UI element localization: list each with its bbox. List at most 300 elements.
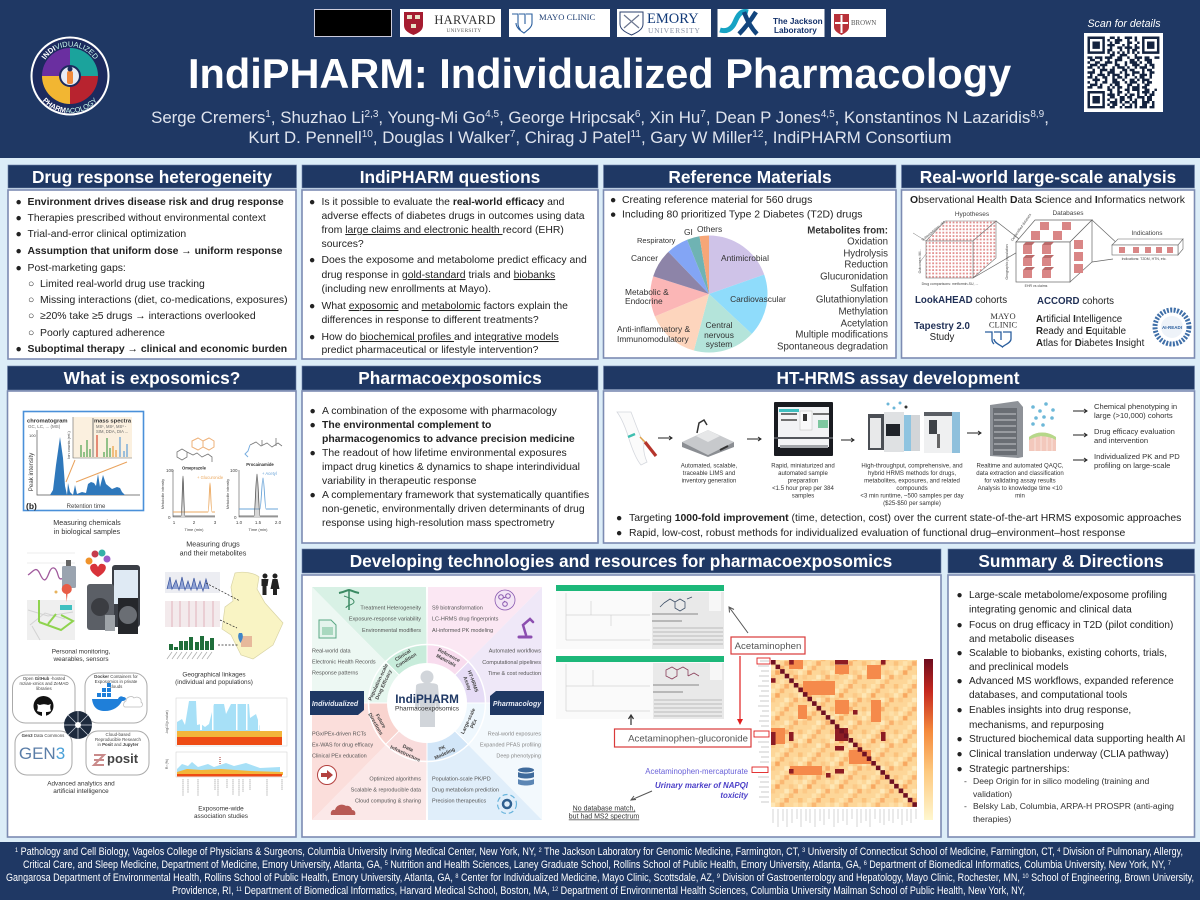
ring labels: Data <box>401 744 414 754</box>
caption: chemicals: Measuring chemicals <box>53 518 121 527</box>
side banners: Individualized <box>312 701 359 708</box>
drug chromatograms <box>161 438 282 532</box>
question list: sources? <box>322 239 364 250</box>
bullet list: Missing interactions (diet, co-medications, exposures) <box>40 295 288 306</box>
footer: affiliations: Gangarosa Department of Environmental Health, Rollins School of Public Health, Emory University, Atlanta, GA, <box>6 872 530 884</box>
bullet list: Therapies prescribed without environmental context <box>28 213 266 224</box>
step captions: traceable LIMS and <box>683 471 735 477</box>
outcomes: and intervention <box>1094 436 1148 445</box>
bullet list: ● <box>310 448 316 459</box>
databases cube: Deidentified datasets <box>1010 213 1032 242</box>
chromatogram figure <box>24 412 144 511</box>
AI-READI logo: AI-READI <box>1162 325 1182 330</box>
exposome-wide association plots <box>165 698 287 796</box>
icon: docker whale <box>92 696 126 711</box>
pie chart: drug categories <box>617 224 786 352</box>
central person and title: IndiPHARM <box>395 693 459 706</box>
bullet list: Poorly captured adherence <box>40 328 165 339</box>
IndiPHARM logo <box>30 36 110 116</box>
question list: How do biochemical profiles and integrative models <box>322 332 559 343</box>
icon: LIMS instrument <box>682 420 734 457</box>
authors: , Konstantinos N Lazaridis <box>835 108 1030 127</box>
caption: EWAS: Exposome-wide <box>198 806 244 812</box>
arrow <box>841 438 854 442</box>
footer: affiliations <box>0 842 1200 900</box>
bullet list: ● <box>16 213 22 224</box>
wedge texts <box>312 606 541 804</box>
footer: affiliations: Nutrition and Health Sciences, Laney Graduate School, Rollins School of Public Health, Emory University, Atlanta, GA, <box>388 859 864 871</box>
step captions: <3 min runtime, ~500 samples per day <box>860 494 965 500</box>
authors: , George Hripcsak <box>499 108 635 127</box>
drug chromatograms: 1.5 <box>255 520 262 525</box>
ring labels: Population-scale <box>367 663 390 702</box>
authors: 11 <box>631 129 641 140</box>
partnership sub-list: - <box>964 776 967 786</box>
note: no database match: No database match, <box>573 806 635 812</box>
summary list: and metabolic diseases <box>969 634 1074 645</box>
cohort labels: Tapestry 2.0 <box>914 321 970 332</box>
drug chromatograms: Omeprazole <box>182 466 207 470</box>
step captions: min <box>1015 494 1025 500</box>
side banners: Pharmacology <box>493 701 542 708</box>
wedge texts: PGx/PEx-driven RCTs <box>312 732 366 738</box>
metabolites list: Metabolites from: <box>807 226 888 236</box>
chromatogram figure: (b) <box>26 501 37 511</box>
wedge texts: Optimized algorithms <box>369 776 421 782</box>
bullet list: The readout of how lifetime environmental exposures <box>322 448 567 459</box>
wearables illustration <box>27 550 140 640</box>
OHDSI line: Observational Health Data Science and Informatics network <box>910 195 1186 206</box>
question list: Does the exposome and metabolome predict efficacy and <box>322 255 587 266</box>
drug chromatograms: 2 <box>193 520 196 525</box>
callout: acetaminophen-glucoronide <box>614 729 751 747</box>
footer: affiliations: Department of Environmental Health Sciences, Columbia University Mailman School of Public Health, New York, NY, <box>558 885 1025 897</box>
bullet list: ○ <box>28 295 34 306</box>
panel: Reference Materials <box>604 165 896 358</box>
outcomes <box>1094 402 1180 470</box>
ring labels: Directions <box>366 712 384 737</box>
panel: What is exposomics? <box>8 366 296 837</box>
authors: , Dean P Jones <box>706 108 821 127</box>
databases cube: Databases <box>1052 210 1084 217</box>
question list: ● <box>309 197 315 208</box>
Harvard logo <box>400 9 501 37</box>
footer: affiliations: 7 <box>1168 860 1171 867</box>
analytics tool cards <box>12 673 149 775</box>
bullet list: ● <box>16 197 22 208</box>
spectrum card: acetaminophen-glucuronide <box>556 656 724 719</box>
analytics tool cards: posit <box>107 751 139 766</box>
bullet list: A combination of the exposome with pharmacology <box>322 406 558 417</box>
heading: Pharmacoexposomics <box>358 368 542 388</box>
outcomes: profiling on large-scale <box>1094 461 1170 470</box>
summary list: and preclinical models <box>969 662 1069 673</box>
drug chromatograms: 100 <box>166 468 174 473</box>
heading <box>302 165 598 188</box>
panel: Pharmacoexposomics <box>302 366 598 543</box>
bullet list: non-genetic, environmentally driven determinants of drug <box>322 504 585 515</box>
authors: 2,3 <box>364 109 379 120</box>
Mayo Clinic mark: MAYO <box>990 311 1016 321</box>
ring labels: PEx <box>469 718 479 729</box>
Brown logo: BROWN <box>851 20 876 27</box>
chromatogram figure: Retention time <box>67 504 106 510</box>
mercapturate labels: Urinary marker of NAPQI <box>655 781 749 790</box>
metabolites list: Methylation <box>838 306 888 318</box>
metabolites list: Reduction <box>844 260 888 270</box>
authors: , Douglas I Walker <box>373 128 510 147</box>
icon: robot arm <box>519 619 533 637</box>
header band <box>0 0 1200 158</box>
wedge texts: Exposure-response variability <box>349 616 421 622</box>
indications strip: Indications <box>1131 230 1163 237</box>
summary list: ● <box>956 764 963 775</box>
side banners <box>310 691 544 715</box>
heading: Reference Materials <box>668 167 832 187</box>
analytics tool cards: Exposomics in private <box>95 679 138 684</box>
heatmap colour bar <box>924 659 933 820</box>
analytics tool cards: clouds <box>110 684 123 689</box>
icon: server and data <box>990 401 1056 458</box>
caption: geography: Geographical linkages <box>182 672 246 678</box>
bullet list: ≥20% take ≥5 drugs → interactions overlooked <box>40 311 256 322</box>
summary list: ● <box>956 734 963 745</box>
bullet list: Limited real-world drug use tracking <box>40 279 205 290</box>
authors: 6 <box>635 109 641 120</box>
bullet list: impact drug kinetics & dynamics to shape interindividual <box>322 462 580 473</box>
caption: geography <box>175 672 253 686</box>
central person and title: Pharmacoexposomics <box>395 706 460 712</box>
metabolites list <box>777 226 888 352</box>
wedge texts: Scalable & reproducible data <box>351 788 422 794</box>
caption: wearables: Personal monitoring, <box>52 648 111 656</box>
pie chart: drug categories: nervous <box>704 330 734 340</box>
caption: chemicals: in biological samples <box>54 527 121 536</box>
AI-READI text: Artificial Intelligence <box>1036 314 1122 325</box>
authors: , Young-Mi Go <box>378 108 485 127</box>
icon: database <box>518 768 534 786</box>
authors: 4,5 <box>485 109 499 120</box>
AI-READI text: Atlas for Diabetes Insight <box>1036 338 1145 349</box>
icon: arm with blood draw <box>617 412 656 465</box>
chromatogram figure: 100 <box>29 433 36 438</box>
outcomes: Individualized PK and PD <box>1094 452 1180 461</box>
pie chart: drug categories: Cancer <box>631 253 658 263</box>
AI-READI text <box>1036 314 1145 349</box>
step captions: data extraction and classification <box>976 471 1064 477</box>
wedge texts: Response patterns <box>312 670 358 676</box>
caption: drugs: and their metabolites <box>180 548 247 558</box>
arrow to acetaminophen card <box>729 607 748 633</box>
bottom bullets: ● <box>616 528 622 539</box>
hypotheses cube <box>913 211 996 286</box>
red arrow <box>739 656 741 719</box>
authors <box>151 108 1049 147</box>
ring labels: PK <box>438 744 447 753</box>
pie chart: drug categories: Cardiovascular <box>730 294 786 304</box>
bullet list: response using high-resolution mass spectrometry <box>322 518 555 529</box>
heading: Developing technologies and resources for pharmacoexposomics <box>350 551 892 571</box>
question list <box>309 197 587 356</box>
Emory logo: UNIVERSITY <box>648 26 701 35</box>
step captions: ($25-$50 per sample) <box>883 501 941 507</box>
bullets <box>610 195 862 220</box>
hypotheses cube: Outcomes: MI... <box>918 249 922 273</box>
bullets: ● <box>610 210 616 220</box>
summary list: ● <box>956 648 963 659</box>
summary list: integrating genomic and clinical data <box>969 604 1132 616</box>
authors: , Gary W Miller <box>641 128 753 147</box>
chromatogram figure: chromatogram <box>27 418 68 424</box>
analytics tool cards: Reproducible Research <box>95 737 141 742</box>
step captions: automated sample <box>778 471 829 477</box>
pie chart: drug categories: Endocrine <box>625 296 663 306</box>
exposome-wide association plots: R² (%) <box>165 759 169 769</box>
wedge texts: Ex-WAS for drug efficacy <box>312 742 373 748</box>
wedge texts: Real-world exposures <box>488 732 541 738</box>
bullet list: variability in therapeutic response <box>322 476 477 487</box>
Jackson Laboratory logo: Laboratory <box>774 26 817 35</box>
ring labels: Condition <box>395 652 418 670</box>
Harvard logo: UNIVERSITY <box>446 28 482 34</box>
title: IndiPHARM: Individualized Pharmacology <box>188 50 1011 97</box>
footer: affiliations: Pathology and Cell Biology, Vagelos College of Physicians & Surgeons, Columbia University Irving Medical Center, New York, NY, <box>18 846 539 858</box>
footer: affiliations: 5 <box>385 860 388 867</box>
step captions: for validating assay results <box>984 478 1056 484</box>
summary list: mechanisms, and repurposing <box>969 720 1104 731</box>
mercapturate labels: Acetaminophen-mercapturate <box>645 767 748 776</box>
bullet list: Assumption that uniform dose → uniform response <box>28 246 283 257</box>
hypotheses cube: Hypotheses <box>955 211 990 218</box>
summary list: ● <box>956 749 963 760</box>
panel: Real-world large-scale analysis <box>902 165 1194 358</box>
pharmacoexposomics wheel <box>310 587 544 820</box>
wedge texts: Expanded PFAS profiling <box>480 742 541 748</box>
wedge texts: Precision therapeutics <box>432 798 486 804</box>
drug chromatograms: 0 <box>234 515 237 520</box>
question list: from large claims and electronic health record (EHR) <box>322 225 564 236</box>
caption: drugs <box>180 540 247 558</box>
summary list: Scalable to biobanks, existing cohorts, trials, <box>969 648 1167 659</box>
arrow <box>747 437 761 441</box>
ring labels: Drug Efficacy <box>375 669 394 701</box>
bullet list: ● <box>310 406 316 417</box>
ring labels: Large-scale <box>460 707 477 735</box>
heading: Real-world large-scale analysis <box>920 167 1176 187</box>
bullet list: ● <box>16 263 22 274</box>
arrow <box>658 436 672 440</box>
authors: 1 <box>265 109 271 120</box>
ring labels: Materials <box>435 653 457 669</box>
bullet list: Post-marketing gaps: <box>28 263 126 274</box>
drug chromatograms: + Glucuronide <box>197 475 224 480</box>
caption: AI: artificial intelligence <box>53 788 109 795</box>
drug chromatograms: 100 <box>230 468 238 473</box>
chromatogram figure: mass spectra <box>94 418 132 424</box>
step captions: Automated, scalable, <box>681 464 738 470</box>
footer: affiliations: The Jackson Laboratory for Genomic Medicine, Farmington, CT, <box>542 846 802 858</box>
footer: affiliations: 11 <box>236 886 242 893</box>
wedge texts: Cloud computing & sharing <box>355 798 421 804</box>
icon: arrow circle <box>318 766 336 784</box>
metabolites list: Hydrolysis <box>843 248 888 260</box>
Mayo Clinic logo <box>509 9 610 37</box>
drug chromatograms: Metabolite intensity <box>226 479 230 509</box>
authors: 10 <box>362 129 373 140</box>
metabolites list: Glutathionylation <box>816 294 888 306</box>
step captions <box>681 464 1064 507</box>
authors: , <box>1044 108 1049 127</box>
wedge texts: Clinical PEx education <box>312 754 367 760</box>
authors: Serge Cremers <box>151 108 265 127</box>
hypotheses cube: Drug comparisons: metformin-SU, ... <box>922 282 978 286</box>
pie chart: drug categories: system <box>706 339 732 349</box>
AI-READI logo <box>1155 310 1189 344</box>
bullet list: Suboptimal therapy → clinical and economic burden <box>28 344 287 355</box>
caption: wearables <box>52 648 111 663</box>
pie chart: drug categories: Metabolic & <box>625 287 669 297</box>
bullet list: ● <box>310 420 316 431</box>
panel: Drug response heterogeneity <box>8 165 296 359</box>
footer: affiliations: Providence, RI, <box>172 885 244 897</box>
authors: , Chirag J Patel <box>515 128 631 147</box>
QR code <box>1084 33 1163 112</box>
heading: IndiPHARM questions <box>360 167 540 187</box>
hypotheses cube: Subpopulation: old... <box>921 218 948 242</box>
footer: affiliations: Division of Gastroenterology and Hepatology, Mayo Clinic, Rochester, MN, <box>720 872 1022 884</box>
bullet list: ● <box>16 246 22 257</box>
outcomes: Drug efficacy evaluation <box>1094 427 1175 436</box>
question list: adverse effects of diabetes drugs in outcomes using data <box>322 211 585 222</box>
icon: caduceus <box>339 590 359 610</box>
question list: predict pharmaceutical or lifestyle intervention? <box>322 345 539 356</box>
chromatogram figure: Ion counts (rel.) <box>66 430 71 459</box>
summary list: ● <box>956 590 963 601</box>
indications strip <box>1112 230 1183 261</box>
note: no database match: but had MS2 spectrum <box>569 814 639 820</box>
heading: Drug response heterogeneity <box>32 167 272 187</box>
pie chart: drug categories: Anti-inflammatory & <box>617 324 690 334</box>
chromatogram figure: SIM, DDA, DIA ... <box>96 429 128 434</box>
summary list: ● <box>956 620 963 631</box>
analytics tool cards: Docker Containers for <box>94 674 138 679</box>
pie chart: drug categories: Immunomodulatory <box>617 334 689 344</box>
heading: HT-HRMS assay development <box>777 368 1020 388</box>
icon: document <box>319 620 336 638</box>
bullet list: Environment drives disease risk and drug response <box>28 197 284 208</box>
bullet list: ○ <box>28 311 34 322</box>
drug chromatograms: Procainamide <box>246 462 274 467</box>
drug chromatograms: + Acetyl <box>262 471 277 476</box>
footer: affiliations: Department of Biomedical Informatics, Harvard Medical School, Boston, MA, <box>242 885 552 897</box>
bottom bullets: Targeting 1000-fold improvement (time, detection, cost) over the current state-of-the-art HRMS exposomic approaches <box>629 513 1181 524</box>
authors: , Shuzhao Li <box>271 108 364 127</box>
scan caption: Scan for details <box>1087 18 1161 30</box>
caption: wearables: wearables, sensors <box>52 656 109 663</box>
panel: HT-HRMS assay development <box>604 366 1194 543</box>
connector lines <box>973 220 1120 278</box>
icon: gear <box>498 794 516 814</box>
indications strip: Indications: T2DM, HTN, etc. <box>1122 257 1166 261</box>
analytics tool cards: in Posit and Jupyter <box>97 742 139 747</box>
question list: ● <box>309 301 315 312</box>
Emory logo <box>617 9 711 37</box>
ring sectors <box>378 654 476 752</box>
Mayo Clinic mark <box>985 311 1017 347</box>
caption: EWAS: association studies <box>194 813 248 820</box>
bottom bullets <box>616 513 1181 539</box>
correlation heatmap <box>752 658 917 827</box>
ring labels <box>366 647 483 764</box>
caption: drugs: Measuring drugs <box>186 540 240 548</box>
Jackson Laboratory logo <box>718 9 824 37</box>
wedge texts: Environmental modifiers <box>362 628 421 634</box>
footer: affiliations: 12 <box>552 886 559 893</box>
central person and title <box>395 670 460 727</box>
metabolites list: Oxidation <box>847 236 888 248</box>
metabolites list: Sulfation <box>850 284 888 294</box>
databases cube: Geographic population <box>1005 244 1009 280</box>
step captions: metabolites, exposures, and related <box>864 478 960 484</box>
step captions: samples <box>792 494 814 500</box>
drug chromatograms: 1.0 <box>236 520 243 525</box>
step captions: High-throughput, comprehensive, and <box>861 464 963 470</box>
panel: Summary & Directions <box>948 549 1194 837</box>
callout: acetaminophen <box>731 637 805 654</box>
chromatogram figure: GC, LC, ... (MS) <box>28 424 61 429</box>
footer: affiliations: 4 <box>1057 847 1061 854</box>
wedge texts: Deep phenotyping <box>496 754 541 760</box>
step captions: compounds <box>896 486 928 492</box>
panel: IndiPHARM questions <box>302 165 598 359</box>
metabolites list: Glucuronidation <box>820 272 888 282</box>
footer: affiliations: University of Connecticut School of Medicine, Farmington, CT, <box>805 846 1057 858</box>
footer: affiliations: 3 <box>802 847 806 854</box>
mercapturate labels <box>645 767 749 800</box>
pie chart: drug categories: Others <box>697 224 722 234</box>
spectrum card: acetaminophen <box>556 585 724 649</box>
bullet list: Trial-and-error clinical optimization <box>28 229 186 240</box>
arrow <box>967 431 981 435</box>
wedge texts: Drug metabolism prediction <box>432 788 499 794</box>
step captions: Rapid, miniaturized and <box>771 464 835 470</box>
ring labels: Reference <box>437 647 461 664</box>
outcomes: Chemical phenotyping in <box>1094 402 1177 411</box>
outcomes: large (>10,000) cohorts <box>1094 411 1173 420</box>
drug chromatograms: 3 <box>214 520 217 525</box>
question list: What exposomic and metabolomic factors explain the <box>322 301 568 312</box>
drug chromatograms: Time (min) <box>249 527 268 532</box>
metabolites list: Acetylation <box>841 318 888 330</box>
footer: affiliations: 10 <box>1022 873 1029 880</box>
cohort labels: Study <box>930 332 955 343</box>
exposome-wide association plots: -log10(p-value) <box>165 710 169 734</box>
callout: acetaminophen-glucoronide: Acetaminophen-glucoronide <box>628 734 748 744</box>
wedge texts: Real-world data <box>312 648 351 654</box>
footer: affiliations: 9 <box>717 873 720 880</box>
callout: acetaminophen: Acetaminophen <box>735 641 801 652</box>
metabolites list: Spontaneous degradation <box>777 342 888 352</box>
cohort labels: LookAHEAD cohorts <box>915 295 1007 306</box>
question list: Is it possible to evaluate the real-world efficacy and <box>322 197 565 208</box>
pie chart: drug categories: Antimicrobial <box>721 253 769 263</box>
bullet list: A complementary framework that systematically quantifies <box>322 490 589 501</box>
ring labels: Infrastructure <box>389 744 421 764</box>
caption: AI <box>47 780 115 795</box>
heading: What is exposomics? <box>64 368 240 388</box>
pie chart: drug categories: Respiratory <box>637 236 676 245</box>
analytics tool cards: Open GitHub -hosted <box>23 676 66 681</box>
